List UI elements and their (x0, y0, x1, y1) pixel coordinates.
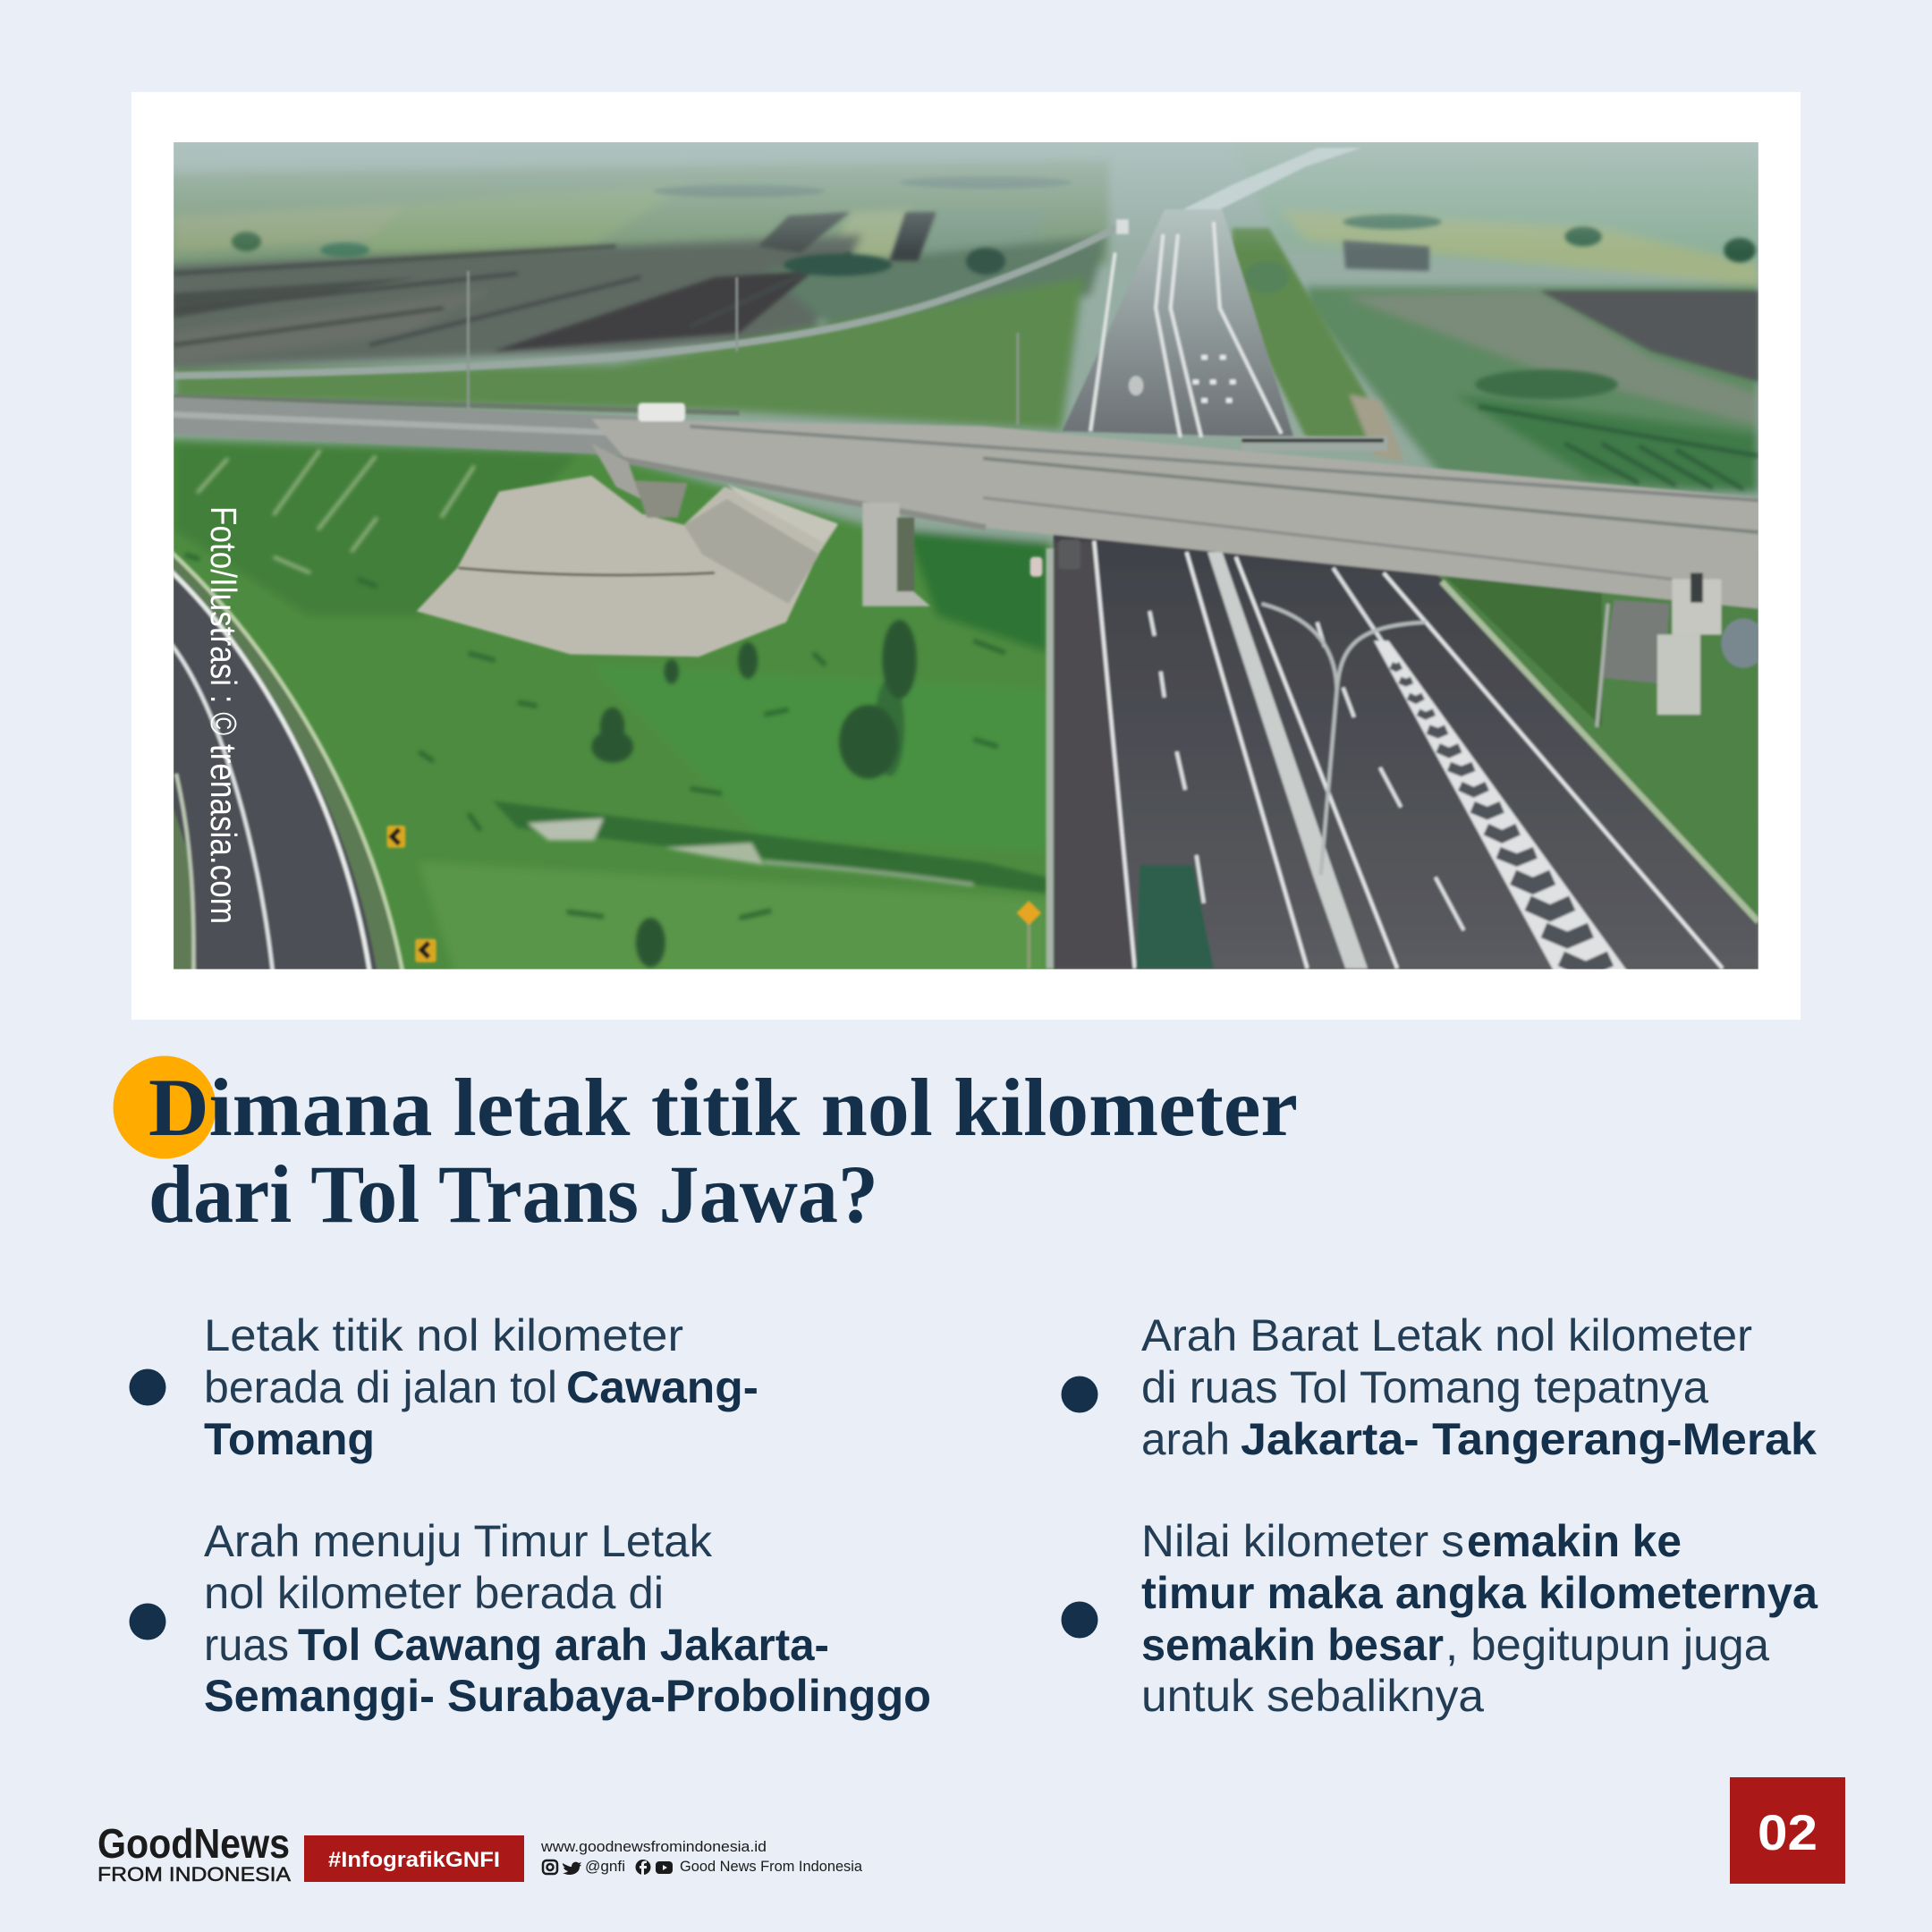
bullet 2: ruas (204, 1620, 289, 1670)
page number (1730, 1777, 1845, 1884)
footer logo: GoodNews (97, 1820, 290, 1867)
bridge: left deck (160, 397, 690, 458)
bullet 4: semakin besar (1141, 1620, 1444, 1670)
bullet 4: , begitupun juga (1445, 1620, 1769, 1670)
slope drainage lines (197, 450, 474, 573)
distant haze (174, 141, 1758, 252)
left pier (862, 503, 930, 606)
bullet 1 (129, 1310, 758, 1464)
icon: instagram (543, 1860, 557, 1874)
bullet 4 (1061, 1516, 1818, 1721)
bullet 1: Tomang (204, 1414, 375, 1464)
bridge: main deck (591, 419, 1758, 609)
hashtag badge (304, 1835, 524, 1882)
bullet 3: Arah Barat Letak nol kilometer (1141, 1310, 1752, 1360)
credit: Foto/Ilustrasi : © trenasia.com (203, 506, 244, 924)
field furrows and plots (758, 212, 851, 252)
bullet 2: Semanggi- Surabaya-Probolinggo (204, 1671, 931, 1721)
footer contacts: @gnfi (585, 1858, 625, 1875)
bullet 3 (1061, 1310, 1817, 1464)
street lamp (1262, 604, 1426, 875)
right fields (1265, 193, 1757, 254)
left curved road (160, 542, 404, 979)
water (528, 818, 604, 840)
page number: 02 (1758, 1804, 1818, 1860)
lower highway asphalt (1054, 530, 1758, 979)
truck (1136, 865, 1214, 969)
icon: facebook (635, 1860, 651, 1875)
yellow sign (1016, 901, 1041, 926)
far highway (1062, 209, 1293, 437)
bullet 2: Arah menuju Timur Letak (204, 1516, 713, 1566)
trees (591, 620, 917, 967)
grass (174, 277, 1084, 431)
abutment (417, 476, 838, 657)
title: dari Tol Trans Jawa? (148, 1148, 878, 1240)
panel: photo frame (131, 92, 1801, 1020)
bullet 2: nol kilometer berada di (204, 1568, 664, 1618)
footer logo: FROM INDONESIA (97, 1863, 291, 1885)
bullet 3: Jakarta- Tangerang-Merak (1241, 1414, 1817, 1464)
photo: highway interchange (160, 130, 1775, 979)
median barrier (1208, 552, 1368, 969)
lane markings (1094, 541, 1723, 969)
sign gantry (1242, 436, 1387, 451)
footer logo (97, 1820, 291, 1885)
bullet 3: di ruas Tol Tomang tepatnya (1141, 1362, 1708, 1412)
chevron hatching (1374, 640, 1629, 973)
bullet 1: Letak titik nol kilometer (204, 1310, 683, 1360)
hashtag badge: #InfografikGNFI (328, 1848, 500, 1872)
bullet 4: timur maka angka kilometernya (1141, 1568, 1818, 1618)
title (148, 1062, 1298, 1240)
bullet 2: Tol Cawang arah Jakarta- (298, 1620, 829, 1670)
footer contacts: www.goodnewsfromindonesia.id (540, 1838, 767, 1855)
icon: twitter (563, 1862, 581, 1875)
bullet 1: berada di jalan tol (204, 1362, 557, 1412)
right pier (1602, 600, 1670, 684)
cars under bridge (1058, 539, 1080, 569)
tree lines (232, 232, 261, 251)
bullet 2 (129, 1516, 931, 1721)
roadside strip right (1230, 225, 1368, 437)
ramp (174, 222, 1127, 376)
white car on bridge (639, 402, 685, 421)
chevron signs (387, 826, 405, 848)
footer contacts (540, 1838, 863, 1875)
poles (468, 271, 1018, 425)
icon: youtube (656, 1861, 673, 1874)
bullet 4: emakin ke (1467, 1516, 1682, 1566)
right embankment (1436, 573, 1758, 918)
bullet 4: Nilai kilometer s (1141, 1516, 1464, 1566)
grass mottling (185, 555, 1005, 918)
bullet 3: arah (1141, 1414, 1230, 1464)
bullet 4: untuk sebaliknya (1141, 1671, 1484, 1721)
accent circle (113, 1055, 216, 1159)
footer contacts: Good News From Indonesia (680, 1858, 863, 1875)
creek band (493, 801, 1047, 894)
title: Dimana letak titik nol kilometer (148, 1062, 1298, 1153)
bullet 1: Cawang- (566, 1362, 758, 1412)
